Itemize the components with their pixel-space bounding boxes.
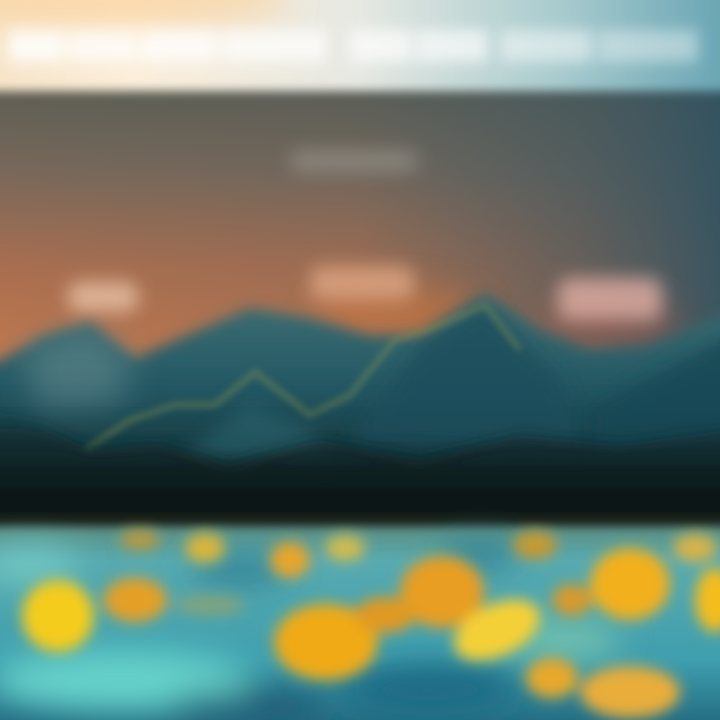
blurred subtitle xyxy=(290,150,418,172)
blurred label: right peak xyxy=(558,278,662,320)
title banner xyxy=(0,0,720,91)
mountain range xyxy=(0,295,720,490)
teal water highlights xyxy=(0,541,620,720)
background sky xyxy=(0,80,720,460)
blurred title text xyxy=(8,30,698,62)
dark treeline xyxy=(0,410,720,540)
blurred label: left peak xyxy=(68,282,138,312)
golden coins xyxy=(22,530,720,718)
blurred label: centre peak xyxy=(310,266,414,300)
water band xyxy=(0,526,720,720)
trend line xyxy=(85,305,520,450)
